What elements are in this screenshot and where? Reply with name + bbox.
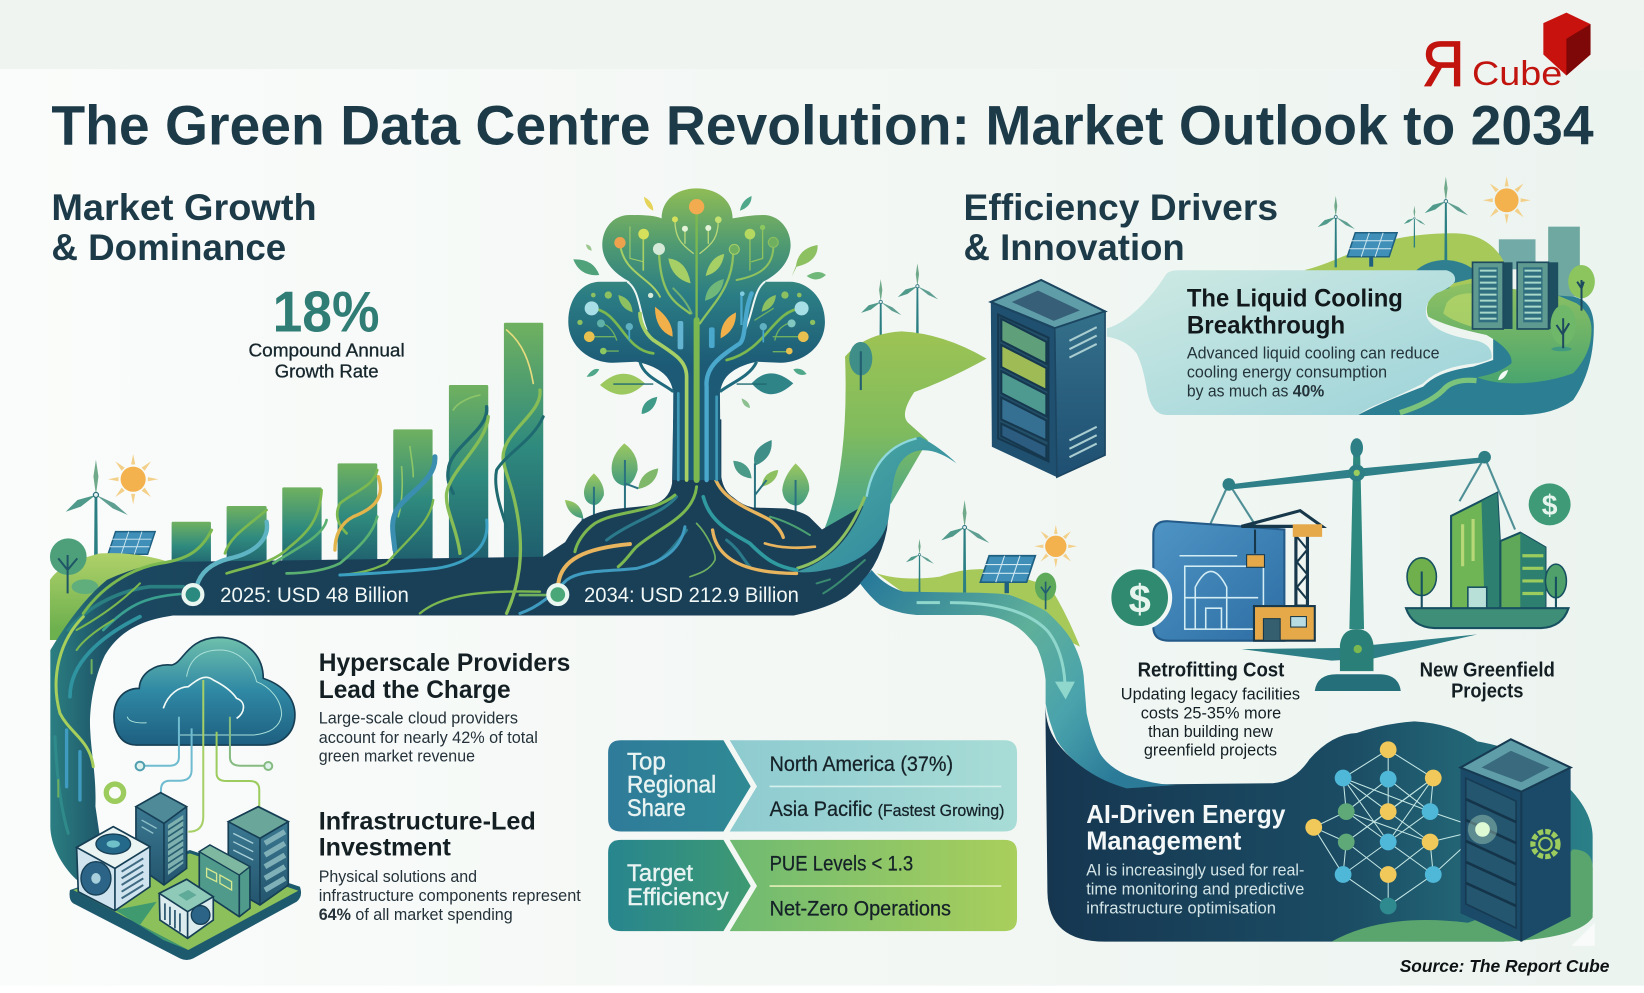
panel: target efficiency [608,840,1017,931]
panel: target efficiency: PUE Levels < 1.3 [770,852,913,875]
text: hyperscale providers: Lead the Charge [319,676,511,704]
panel: liquid cooling bubble: cooling energy consumption [1187,363,1387,381]
air handling unit small [159,879,213,938]
text: retrofitting cost: Updating legacy facilities [1121,684,1300,703]
panel: AI-driven energy management: time monitoring and predictive [1086,880,1304,898]
panel: top regional share: Regional [627,772,716,798]
text: hyperscale providers: account for nearly 42% of total [319,729,538,747]
scale strings [1208,457,1515,530]
stat: 18% CAGR: 18% [273,280,380,344]
panel: liquid cooling bubble: by as much as 40% [1187,382,1325,400]
text: hyperscale providers: Hyperscale Providers [319,649,570,677]
panel: top regional share: Share [627,795,686,821]
panel: AI-driven energy management: Management [1086,825,1242,855]
panel: top regional share: Top [627,749,666,775]
icon: AI server [1461,739,1571,942]
panel: target efficiency: Efficiency [627,884,729,910]
tree canopy and trunk [568,188,825,480]
panel: top regional share [608,740,1017,832]
heading: market growth [51,187,317,268]
panel: liquid cooling bubble: Breakthrough [1187,312,1345,339]
stat: 18% CAGR [248,280,405,381]
text: retrofitting cost [1121,658,1300,759]
text: infrastructure-led investment: Investment [319,834,451,862]
panel: AI-driven energy management [860,570,1595,946]
icon: server rack [991,280,1105,477]
neural network [1305,741,1483,914]
server tower right [228,807,288,905]
icon: dollar coin right [1529,483,1571,525]
icon: dollar coin left [1109,567,1170,628]
panel: top regional share: Asia Pacific [770,798,872,821]
leaves on canopy [618,254,776,349]
root vines [520,470,865,613]
logo: RCube: Cube [1472,55,1562,93]
circuit branches [590,215,803,480]
text: retrofitting cost: than building new [1148,722,1274,741]
heading: market growth: Market Growth [51,187,317,228]
panel: liquid cooling bubble: The Liquid Cooling [1187,286,1403,313]
cloud network illustration [70,637,301,960]
panel: target efficiency: Target [627,860,693,886]
heading: efficiency drivers: Efficiency Drivers [964,187,1278,228]
logo: RCube: Я [1422,27,1465,100]
curling wave [797,437,957,572]
text: new greenfield projects [1420,658,1555,702]
panel: AI-driven energy management: AI is increasingly used for real- [1086,862,1304,880]
panel: top regional share: North America (37%) [770,753,953,776]
floating leaves [573,196,826,414]
stat: 18% CAGR: Compound Annual [248,340,405,361]
small landscape with turbines on flow [877,500,1080,647]
title: The Green Data Centre Revolution: Market Outlook to 2034 [51,95,1594,157]
cloud [114,637,295,745]
air handling unit large [77,827,150,911]
text: retrofitting cost: costs 25-35% more [1141,703,1281,722]
tree [568,188,826,480]
scale illustration [1109,438,1571,691]
chart: market growth bars [172,323,543,570]
side branches [640,362,757,392]
flow band with arrow [860,570,1177,788]
panel: AI-driven energy management: infrastructure optimisation [1086,899,1276,917]
panel: liquid cooling bubble: Advanced liquid cooling can reduce [1187,345,1440,363]
market value river band [50,330,957,880]
heading: efficiency drivers: & Innovation [964,227,1185,268]
icon: dollar coin left: $ [1129,577,1151,621]
panel: top regional share: (Fastest Growing) [878,801,1004,820]
panel: AI-driven energy management: AI-Driven Energy [1086,799,1286,829]
bar and band vines [68,330,543,630]
heading: market growth: & Dominance [51,227,286,268]
circuit nodes [577,199,815,354]
text: new greenfield projects: New Greenfield [1420,658,1555,681]
text: hyperscale providers: green market revenue [319,747,475,765]
source line: Source: The Report Cube [1400,956,1609,976]
panel: liquid cooling bubble [1107,270,1492,415]
text: infrastructure-led investment: Physical solutions and [319,868,477,886]
text: infrastructure-led investment: 64% of all market spending [319,906,513,924]
heading: efficiency drivers [964,187,1278,268]
liquid cooling landscape [1305,176,1594,415]
ring [106,784,124,801]
scale base [1223,438,1491,691]
text: infrastructure-led investment [319,807,581,924]
connector lines [143,680,265,832]
text: new greenfield projects: Projects [1451,679,1523,702]
text: retrofitting cost: greenfield projects [1144,740,1277,759]
text: hyperscale providers [319,649,570,765]
text: infrastructure-led investment: Infrastructure-Led [319,807,536,835]
left band vines [55,617,140,833]
milestone: 2025: 2025: USD 48 Billion [220,584,409,607]
text: retrofitting cost: Retrofitting Cost [1138,658,1285,681]
server unit [199,845,250,917]
icon: blueprint and crane [1153,511,1322,641]
white gaps beneath canopy [640,363,753,393]
icon: dollar coin right: $ [1542,489,1558,521]
left landscape: hill, wind turbine, solar panel, sun [50,454,168,640]
text: infrastructure-led investment: infrastructure components represent [319,887,581,905]
stat: 18% CAGR: Growth Rate [275,360,378,381]
panel: target efficiency: Net-Zero Operations [770,897,951,920]
logo: RCube [1422,13,1591,100]
platform [70,850,301,960]
saplings around the tree [565,440,809,527]
text: hyperscale providers: Large-scale cloud providers [319,710,518,728]
green hill with turbines [822,263,987,535]
server tower left [136,793,187,885]
icon: greenfield building [1406,493,1569,628]
milestone: 2034: 2034: USD 212.9 Billion [584,584,799,607]
icon: server racks in landscape [1473,262,1595,351]
